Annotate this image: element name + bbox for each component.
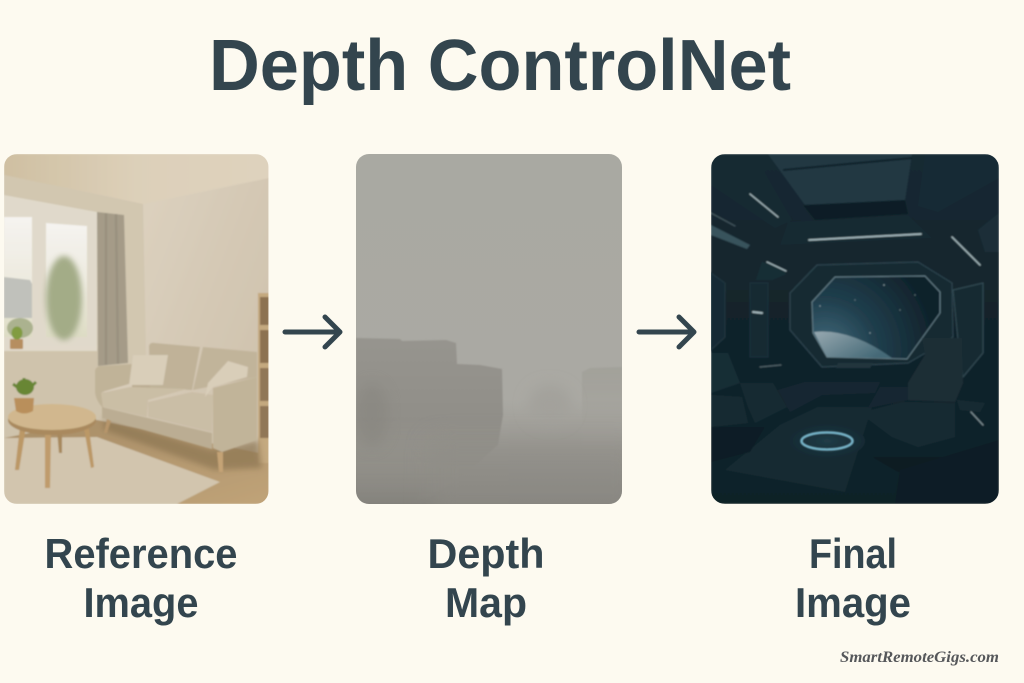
coffee table [8,404,96,488]
wall [104,178,268,452]
label: Depth Map [428,530,544,626]
right chair [860,338,985,472]
label: Final Image [795,530,911,626]
viewport [812,276,940,359]
sofa shadow [104,418,262,470]
ceiling left [711,156,792,228]
ceiling [4,154,268,191]
ceiling right [918,154,999,212]
building outside [4,277,32,318]
depth silhouette: sofa shape [356,338,503,450]
stars [819,284,916,334]
light strips [711,194,983,425]
label: Reference Image [44,530,238,626]
arrow: depth to final [639,317,694,347]
ceiling panel [768,154,912,205]
depth floor fog [610,492,622,504]
label: Reference Image: Reference [44,530,238,577]
small plant on sill [10,326,23,349]
room shading [4,154,269,504]
depth haze [528,385,572,425]
right wall frame [953,283,983,377]
left window pane [4,216,32,282]
panel: depth map [356,154,622,504]
console under window [836,363,873,368]
window frame [4,195,97,348]
planet [814,332,892,358]
label: Depth Map: Depth [428,530,544,577]
right window pane [46,222,88,316]
curtain [97,212,128,366]
label: Final Image: Image [795,579,911,626]
window bezel [790,262,953,367]
floor [725,407,872,492]
depth silhouette: right shelf [584,368,621,374]
floor ring glow [789,424,865,458]
left wall strip [711,225,750,249]
tree outside [46,256,82,340]
arrow: reference to depth [285,317,340,347]
left wall panels [711,273,725,350]
back bench [778,382,880,412]
left wall seat back [711,353,787,462]
panel: reference image (living room) [4,154,269,504]
cushions [129,355,248,397]
panel: final image (spaceship interior) [711,154,999,504]
label: Reference Image: Image [84,579,198,626]
watermark: SmartRemoteGigs.com [840,649,999,666]
potted plant on table [13,378,36,414]
label: Final Image: Final [809,530,897,577]
title: Depth ControlNet [209,26,791,106]
label: Depth Map: Map [445,579,527,626]
floor [4,420,269,504]
lower wall under window [12,389,104,436]
dark floor right [895,440,999,504]
floor ring light [802,432,852,450]
sofa [95,343,257,472]
left wall [75,192,145,364]
scene shading [711,154,999,504]
window sill [4,348,98,352]
shelf [258,293,269,463]
rug [4,437,220,504]
